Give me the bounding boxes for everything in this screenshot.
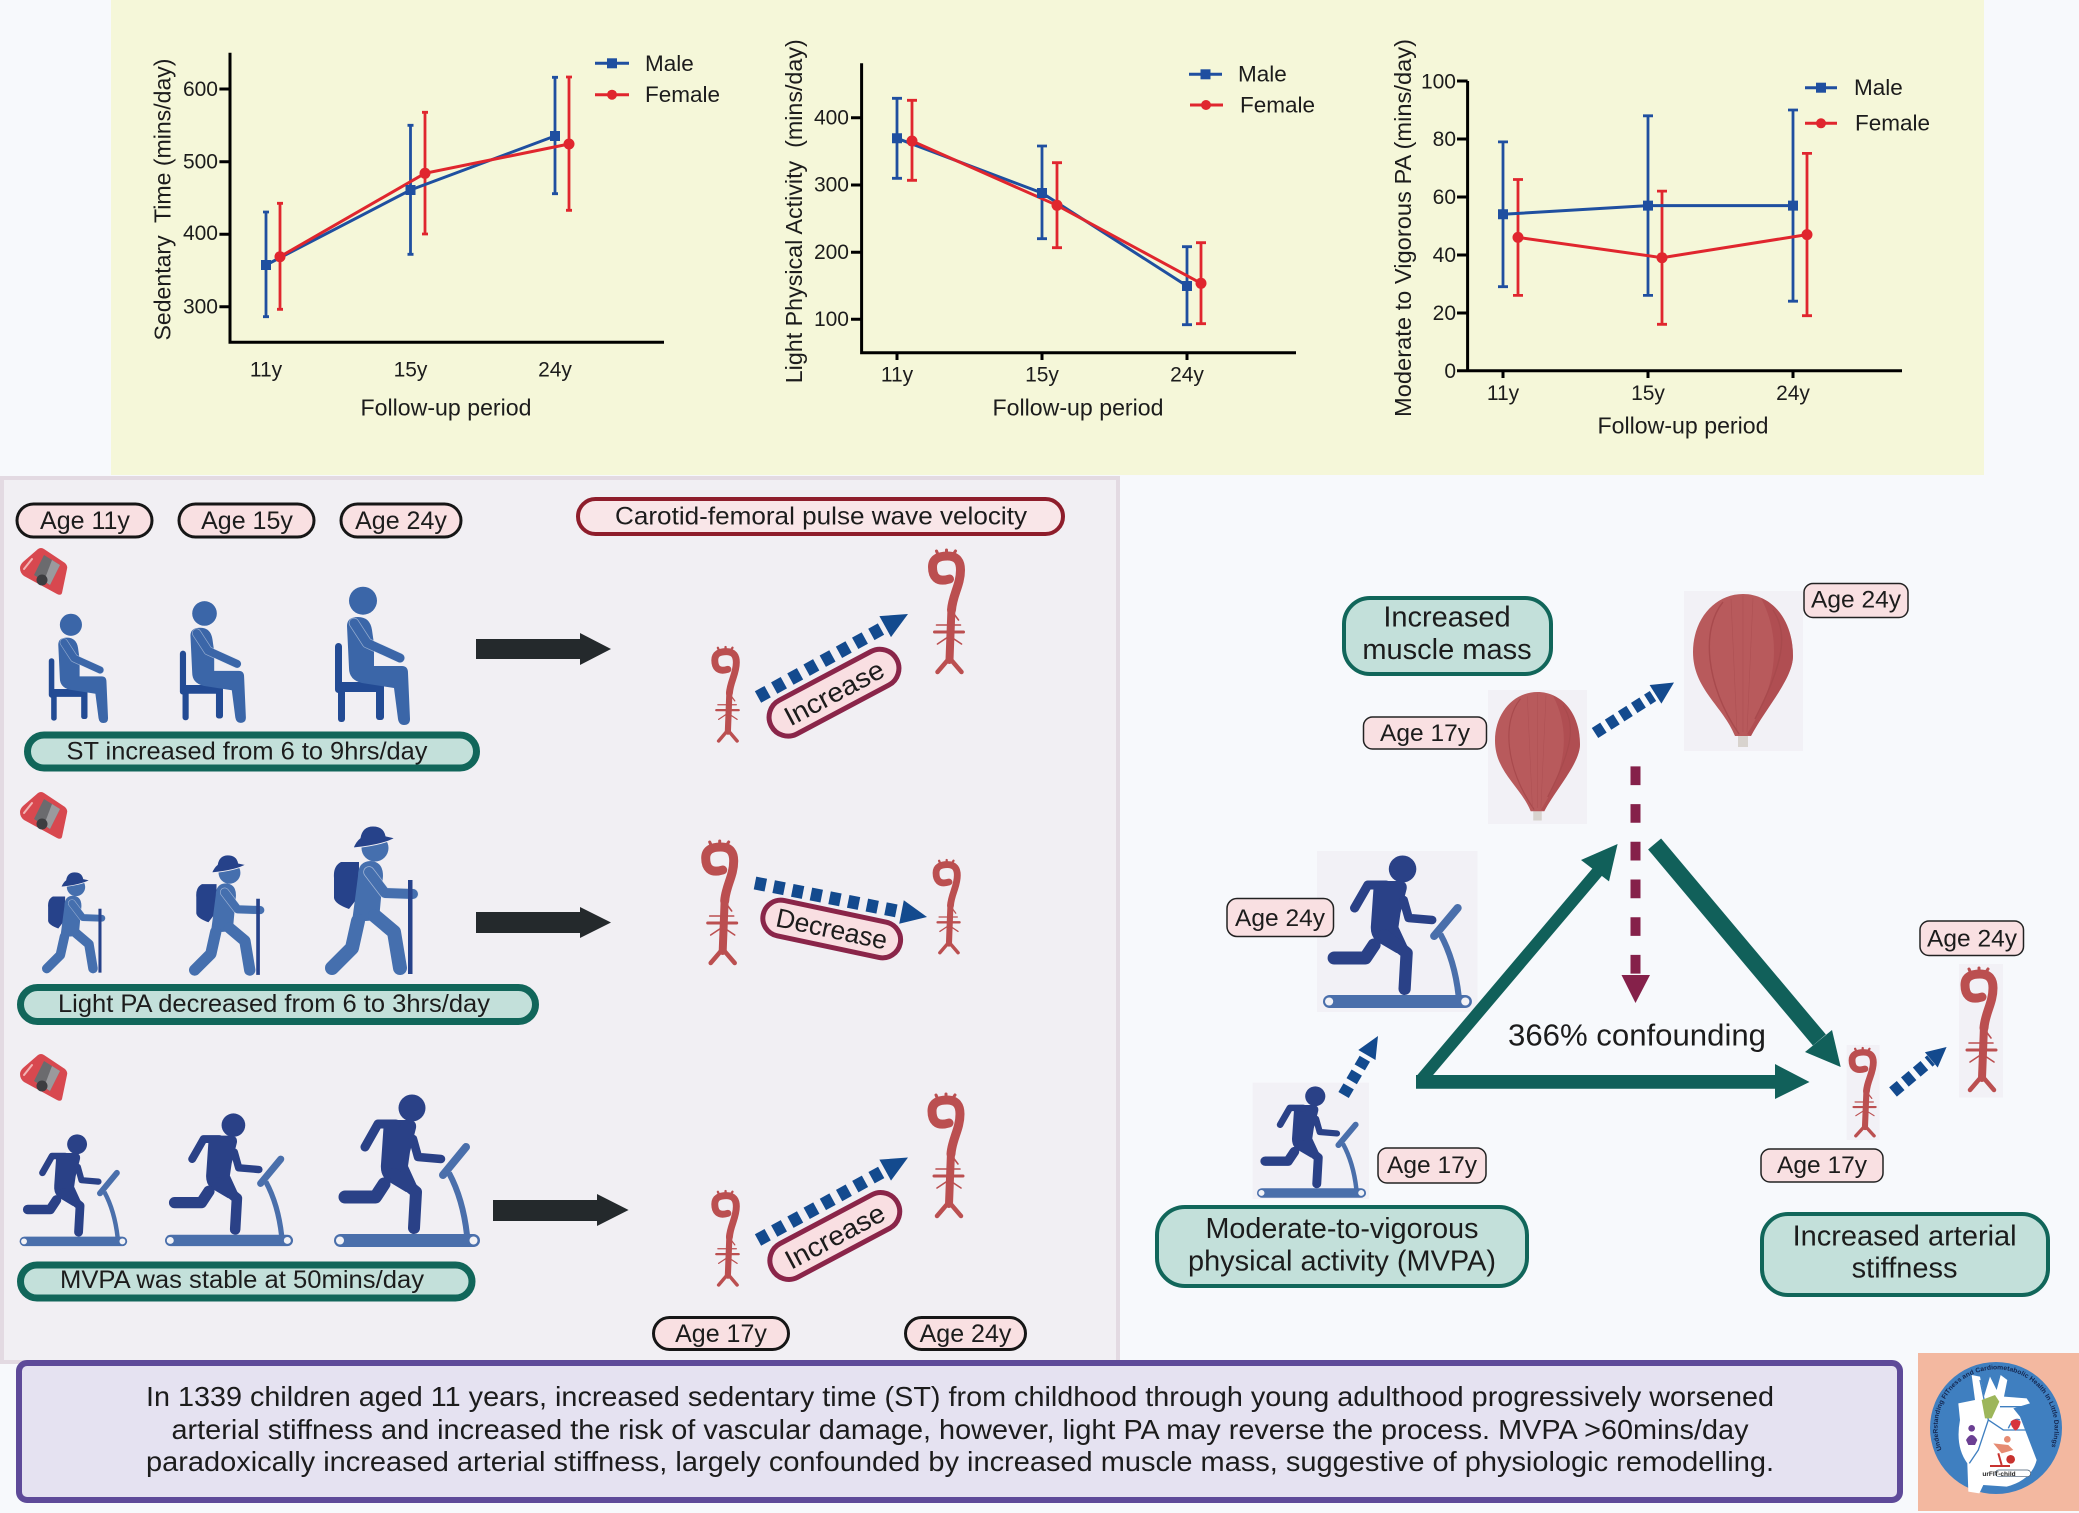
chart: light physical activity: 15y — [1025, 364, 1059, 387]
chart: sedentary time: 11y — [250, 359, 283, 382]
chart: light physical activity: Male — [1238, 62, 1287, 87]
age label: 15y: Age 15y — [201, 507, 293, 535]
age tag: aorta 24y — [1920, 921, 2024, 956]
chart: light physical activity: Light Physical Activity (mins/day) — [781, 39, 807, 383]
arrow: triangle right — [1655, 844, 1841, 1067]
age label: 24y pulse wave: Age 24y — [920, 1320, 1012, 1348]
chart: light physical activity: 400 — [814, 106, 849, 129]
chart: light physical activity: 11y — [881, 364, 914, 387]
box: moderate-to-vigorous physical activity: physical activity (MVPA) — [1188, 1246, 1496, 1278]
icon: small aorta right — [1847, 1045, 1880, 1140]
chart: light physical activity: Follow-up period — [992, 395, 1164, 421]
chart: moderate to vigorous PA: 11y — [1487, 382, 1520, 405]
chart: sedentary time: Male — [645, 51, 694, 76]
chart: moderate to vigorous PA: 40 — [1433, 244, 1456, 267]
callout: increase row 1 — [762, 643, 906, 743]
chart: sedentary time: 600 — [183, 78, 218, 101]
chart: sedentary time: 500 — [183, 151, 218, 174]
icon: sitting person age 24 — [335, 587, 410, 725]
age label: 24y pulse wave — [906, 1318, 1026, 1350]
chart: moderate to vigorous PA — [1390, 39, 1930, 438]
icon: small muscle age 17 — [1488, 690, 1587, 824]
age label: 24y: Age 24y — [355, 507, 447, 535]
chart: light physical activity: 300 — [814, 174, 849, 197]
icon: large aorta row 2 — [706, 841, 737, 963]
logo: urFIT-child — [1918, 1353, 2079, 1511]
arrow: increase row 1 — [758, 614, 908, 697]
box: increased arterial stiffness: stiffness — [1852, 1253, 1958, 1285]
chart: sedentary time: Sedentary Time (mins/day) — [150, 58, 176, 340]
summary box: paradoxically increased arterial stiffness, largely confounded by increased muscle mass, suggestive of physiologic remodelling. — [146, 1446, 1774, 1477]
age label: 24y — [341, 504, 461, 537]
arrow: MVPA to stiffness — [493, 1194, 629, 1226]
callout: sedentary time: ST increased from 6 to 9hrs/day — [66, 737, 428, 765]
callout: decrease row 2 — [759, 897, 904, 961]
age label: 11y: Age 11y — [40, 507, 130, 535]
chart: sedentary time: 24y — [538, 359, 572, 382]
box: increased arterial stiffness: Increased arterial — [1793, 1221, 2017, 1253]
summary box — [19, 1363, 1900, 1500]
age tag: runner 17y — [1378, 1148, 1486, 1183]
age tag: muscle 24y — [1804, 584, 1908, 618]
age tag: aorta 17y: Age 17y — [1777, 1152, 1868, 1179]
label: carotid-femoral pulse wave velocity — [578, 499, 1063, 534]
chart: moderate to vigorous PA: Moderate to Vigorous PA (mins/day) — [1390, 39, 1416, 417]
box: increased muscle mass: muscle mass — [1362, 634, 1532, 666]
callout: MVPA: MVPA was stable at 50mins/day — [60, 1266, 425, 1294]
icon: sitting person age 11 — [49, 614, 108, 723]
age label: 15y — [179, 504, 314, 537]
callout: light PA: Light PA decreased from 6 to 3hrs/day — [58, 990, 491, 1018]
icon: small aorta row 2 — [936, 860, 960, 953]
icon: walking person age 24 — [332, 826, 413, 974]
age tag: runner 17y: Age 17y — [1387, 1152, 1478, 1179]
chart: light physical activity: 200 — [814, 241, 849, 264]
icon: large aorta row 1 — [932, 550, 964, 672]
icon: treadmill runner 24y — [1317, 851, 1478, 1012]
chart: moderate to vigorous PA: Female — [1855, 111, 1930, 136]
chart: moderate to vigorous PA: 20 — [1433, 302, 1456, 325]
panel: mediation diagram — [1157, 584, 2048, 1295]
chart: sedentary time: 15y — [394, 359, 428, 382]
chart: moderate to vigorous PA: 0 — [1444, 360, 1456, 383]
arrow: triangle bottom — [1416, 1064, 1810, 1099]
label: carotid-femoral pulse wave velocity: Carotid-femoral pulse wave velocity — [615, 502, 1028, 530]
age tag: muscle 24y: Age 24y — [1811, 586, 1902, 614]
icon: accelerometer device row 1 — [20, 548, 67, 595]
age tag: muscle 17y: Age 17y — [1380, 720, 1471, 747]
age label: 17y pulse wave: Age 17y — [675, 1320, 767, 1348]
age label: 11y — [17, 504, 152, 537]
arrow: sedentary to stiffness — [476, 633, 611, 665]
arrow: muscle growth — [1595, 682, 1674, 733]
box: moderate-to-vigorous physical activity: Moderate-to-vigorous — [1206, 1213, 1478, 1245]
logo: urFIT-child: UndeRstanding FITness and Cardiometabolic Health In Little Darlings — [1933, 1364, 2059, 1451]
panel: longitudinal trajectories — [2, 478, 1118, 1362]
icon: treadmill runner age 15 — [165, 1113, 293, 1246]
box: increased muscle mass — [1344, 598, 1551, 674]
chart: sedentary time: Follow-up period — [360, 395, 532, 421]
panel: charts — [111, 0, 1984, 475]
age tag: runner 24y: Age 24y — [1235, 905, 1326, 932]
arrow: triangle left — [1421, 844, 1618, 1080]
arrow: light PA to stiffness — [476, 907, 611, 938]
logo: urFIT-child: urFIT-child — [1982, 1471, 2016, 1478]
chart: moderate to vigorous PA: Male — [1854, 75, 1903, 100]
age tag: muscle 17y — [1364, 717, 1486, 749]
icon: accelerometer device row 3 — [20, 1054, 67, 1101]
icon: small aorta row 3 — [715, 1191, 739, 1285]
age tag: aorta 17y — [1761, 1149, 1883, 1182]
box: increased muscle mass: Increased — [1383, 601, 1511, 633]
chart: light physical activity: 24y — [1170, 364, 1204, 387]
icon: small aorta row 1 — [715, 647, 739, 741]
box: moderate-to-vigorous physical activity — [1157, 1207, 1527, 1286]
age tag: runner 24y — [1227, 898, 1334, 936]
arrow: increase row 3 — [758, 1158, 908, 1240]
arrow: dashed confounding — [1622, 766, 1650, 1003]
chart: sedentary time — [150, 51, 720, 421]
age tag: aorta 24y: Age 24y — [1927, 925, 2018, 952]
chart: moderate to vigorous PA: 60 — [1433, 186, 1456, 209]
box: increased arterial stiffness — [1762, 1214, 2048, 1295]
icon: treadmill runner 17y — [1253, 1083, 1369, 1199]
callout: light PA — [20, 988, 536, 1022]
summary box: In 1339 children aged 11 years, increased sedentary time (ST) from childhood through young adulthood progressively worsened — [146, 1381, 1774, 1412]
icon: walking person age 15 — [195, 855, 260, 975]
age label: 17y pulse wave — [654, 1318, 788, 1350]
chart: moderate to vigorous PA: 100 — [1421, 70, 1456, 93]
icon: large muscle age 24 — [1684, 591, 1803, 751]
callout: increase row 3 — [763, 1186, 906, 1286]
icon: sitting person age 15 — [180, 601, 246, 723]
callout: sedentary time — [28, 735, 476, 768]
chart: light physical activity: 100 — [814, 308, 849, 331]
callout: increase row 3: Increase — [780, 1198, 890, 1275]
chart: moderate to vigorous PA: Follow-up period — [1598, 412, 1768, 438]
icon: large aorta row 3 — [932, 1094, 963, 1216]
callout: decrease row 2: Decrease — [773, 903, 890, 955]
summary box: arterial stiffness and increased the risk of vascular damage, however, light PA may reverse the process. MVPA >60mins/day — [172, 1414, 1749, 1445]
chart: light physical activity: Female — [1240, 92, 1315, 117]
chart: moderate to vigorous PA: 24y — [1776, 382, 1810, 405]
icon: accelerometer device row 2 — [20, 792, 67, 839]
icon: treadmill runner age 24 — [334, 1094, 480, 1247]
arrow: stiffness change — [1893, 1047, 1947, 1092]
callout: MVPA — [20, 1265, 472, 1298]
callout: increase row 1: Increase — [779, 654, 889, 732]
chart: sedentary time: 400 — [183, 222, 218, 245]
chart: sedentary time: 300 — [183, 295, 218, 318]
arrow: decrease row 2 — [755, 883, 927, 924]
icon: large aorta right — [1959, 964, 2003, 1098]
chart: moderate to vigorous PA: 80 — [1433, 128, 1456, 151]
icon: treadmill runner age 11 — [20, 1134, 127, 1246]
chart: sedentary time: Female — [645, 82, 720, 107]
chart: moderate to vigorous PA: 15y — [1631, 382, 1665, 405]
chart: light physical activity — [781, 39, 1315, 421]
icon: walking person age 11 — [47, 872, 102, 973]
label: 366% confounding: 366% confounding — [1508, 1018, 1766, 1053]
arrow: MVPA change — [1344, 1036, 1378, 1095]
